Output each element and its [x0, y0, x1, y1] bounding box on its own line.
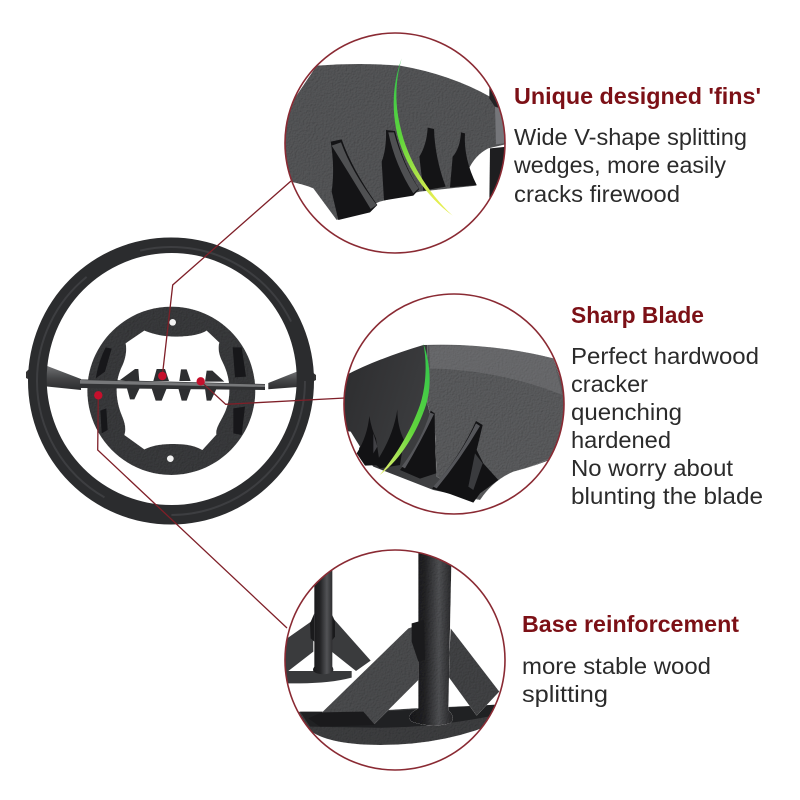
circle outline [285, 550, 505, 770]
front left brace [319, 625, 420, 725]
circle outline [344, 294, 564, 514]
outer ring [28, 237, 314, 525]
fin highlights [373, 413, 483, 490]
detail circle: fins [277, 33, 510, 253]
description: more stable wood [522, 653, 711, 679]
description: quenching [571, 399, 682, 425]
description [571, 343, 763, 509]
upper lighter band [429, 345, 563, 395]
description: splitting [522, 681, 608, 707]
description: No worry about [571, 455, 734, 481]
fin wedges [331, 128, 477, 220]
callout: base reinforcement [522, 611, 739, 707]
center bar highlight [80, 380, 265, 387]
marker dots [94, 372, 205, 399]
side arms [26, 364, 316, 390]
green arc [379, 343, 430, 475]
description: hardened [571, 427, 671, 453]
white notch [348, 431, 360, 448]
description: Wide V-shape splitting [514, 124, 747, 150]
heading: Sharp Blade [571, 302, 704, 328]
plate slots [96, 347, 246, 435]
description: Perfect hardwood [571, 343, 759, 369]
heading: Base reinforcement [522, 611, 739, 637]
blade body [277, 64, 510, 220]
fin wedges [357, 409, 498, 503]
base top surface [300, 704, 500, 728]
description: cracker [571, 371, 648, 397]
plate holes [167, 319, 176, 462]
callout: unique designed fins [513, 83, 761, 207]
leader line: fins [162, 181, 291, 376]
circle outline [285, 33, 505, 253]
description [513, 124, 747, 207]
description [522, 653, 711, 707]
product: top view of splitter wheel [26, 237, 316, 525]
green arc [394, 58, 453, 216]
leader line: sharp blade [201, 381, 345, 404]
fin highlights [332, 132, 419, 209]
rear braces [280, 617, 371, 671]
inner base plate [87, 307, 255, 475]
description: cracks firewood [514, 181, 680, 207]
detail circle: base reinforcement [280, 548, 513, 770]
heading: Unique designed 'fins' [514, 83, 761, 109]
blade body [340, 345, 570, 500]
callout: sharp blade [571, 302, 763, 509]
side post [489, 88, 504, 198]
detail circle: sharp blade [340, 294, 570, 514]
rear post [313, 568, 333, 674]
weld beads [308, 613, 425, 727]
leader line: base [98, 395, 287, 628]
textured overlay [427, 345, 567, 500]
fins [120, 369, 224, 401]
rear base plate [283, 671, 352, 683]
center bar [80, 379, 265, 390]
front base disc [298, 705, 489, 745]
front right brace [448, 628, 499, 716]
front post [409, 548, 453, 725]
description: wedges, more easily [513, 152, 726, 178]
description: blunting the blade [571, 483, 763, 509]
